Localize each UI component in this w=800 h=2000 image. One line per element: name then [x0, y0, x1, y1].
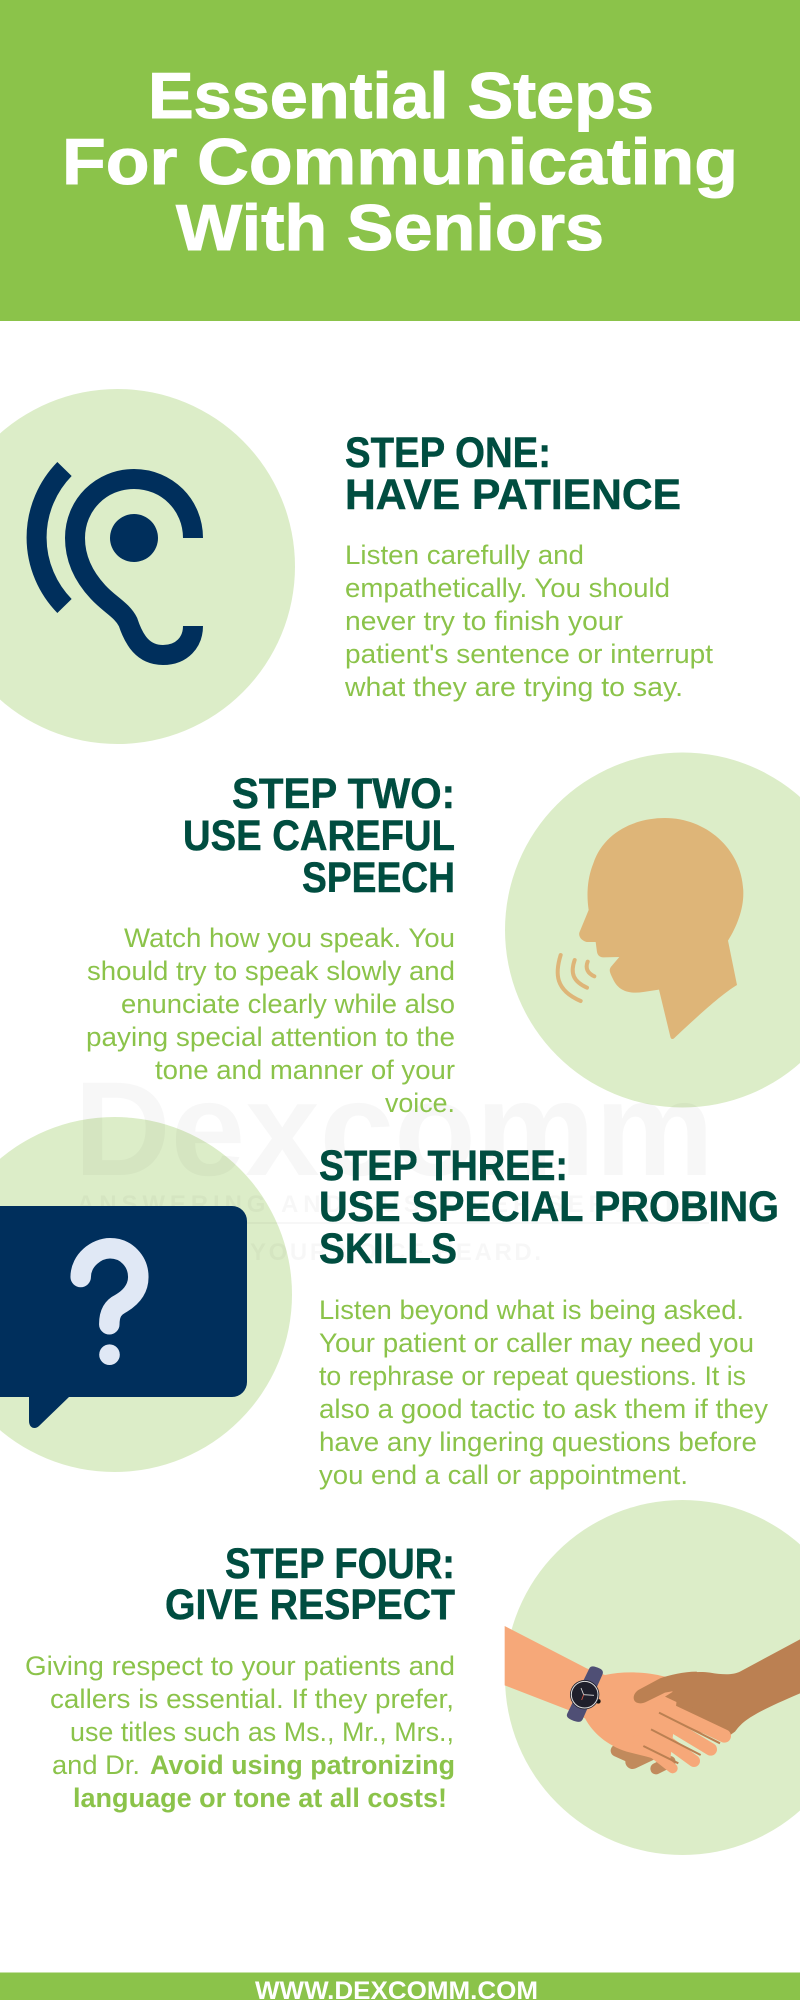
body: step three: to rephrase or repeat questions. It is: [319, 1361, 746, 1391]
brown thumb: [634, 1672, 717, 1708]
watermark logo: YOUR VOICE HEARD.: [250, 1239, 541, 1266]
heading: step three: STEP THREE:: [319, 1143, 568, 1190]
body: step three: [319, 1295, 769, 1490]
heading: step one: HAVE PATIENCE: [345, 472, 681, 519]
body: step three: Listen beyond what is being asked.: [319, 1295, 744, 1325]
heading: step two: [183, 771, 455, 902]
title: [62, 59, 738, 264]
body: step three: Your patient or caller may need you: [319, 1328, 754, 1358]
icon: handshake: [505, 1626, 800, 1769]
heading: step four: GIVE RESPECT: [165, 1582, 455, 1629]
circle: step four: [505, 1500, 800, 1855]
footer bar: [0, 1972, 800, 2000]
body: step one: empathetically. You should: [345, 573, 670, 603]
heading: step two: SPEECH: [302, 855, 455, 902]
body: step four: and Dr.: [52, 1750, 140, 1780]
title: Essential Steps: [148, 59, 654, 132]
heading: step two: STEP TWO:: [232, 771, 455, 818]
light hand: [505, 1626, 724, 1768]
body: step three: also a good tactic to ask them if they: [319, 1394, 769, 1424]
header banner: [0, 0, 800, 321]
body: step four: [25, 1651, 455, 1813]
body: step one: Listen carefully and: [345, 540, 584, 570]
brown hand back: [650, 1639, 800, 1740]
wristwatch: [567, 1666, 603, 1722]
heading: step three: SKILLS: [319, 1226, 457, 1273]
body: step two: [86, 923, 455, 1118]
watermark logo: ANSWERING AND CUSTOMER SERVICES: [77, 1191, 702, 1218]
icon: question speech bubble: [0, 1206, 247, 1428]
body: step one: never try to finish your: [345, 606, 623, 636]
heading: step four: STEP FOUR:: [225, 1541, 455, 1588]
body: step two: tone and manner of your: [155, 1055, 455, 1085]
body: step four: language or tone at all costs!: [73, 1783, 447, 1813]
body: step four: Giving respect to your patients and: [25, 1651, 455, 1681]
heading: step two: USE CAREFUL: [183, 813, 455, 860]
heading: step three: [319, 1143, 779, 1273]
step three text: [319, 1143, 779, 1490]
watermark logo: Dexcomm: [74, 1055, 714, 1204]
heading: step four: [165, 1541, 455, 1629]
circle: step one: [0, 389, 295, 744]
body: step one: [344, 540, 714, 702]
step two text: [86, 771, 455, 1118]
circle: step two: [505, 752, 800, 1108]
body: step four: callers is essential. If they prefer,: [50, 1684, 454, 1714]
body: step two: should try to speak slowly and: [87, 956, 455, 986]
icon: speaking head: [558, 818, 743, 1039]
icon: ear: [37, 469, 193, 655]
body: step two: enunciate clearly while also: [121, 989, 455, 1019]
step four text: [25, 1541, 455, 1813]
heading: step one: STEP ONE:: [345, 430, 551, 477]
body: step one: patient's sentence or interrupt: [345, 639, 714, 669]
body: step two: Watch how you speak. You: [124, 923, 455, 953]
body: step three: you end a call or appointment.: [319, 1460, 688, 1490]
body: step two: paying special attention to the: [86, 1022, 455, 1052]
body: step four: Avoid using patronizing: [150, 1750, 455, 1780]
title: With Seniors: [176, 191, 604, 264]
body: step four: use titles such as Ms., Mr., Mrs.,: [70, 1717, 454, 1747]
circle: step three: [0, 1117, 292, 1472]
body: step two: voice.: [385, 1088, 455, 1118]
body: step three: have any lingering questions before: [319, 1427, 757, 1457]
step one text: [344, 430, 714, 702]
heading: step three: USE SPECIAL PROBING: [319, 1184, 779, 1231]
title: For Communicating: [62, 125, 738, 198]
heading: step one: [345, 430, 681, 519]
body: step one: what they are trying to say.: [344, 672, 683, 702]
